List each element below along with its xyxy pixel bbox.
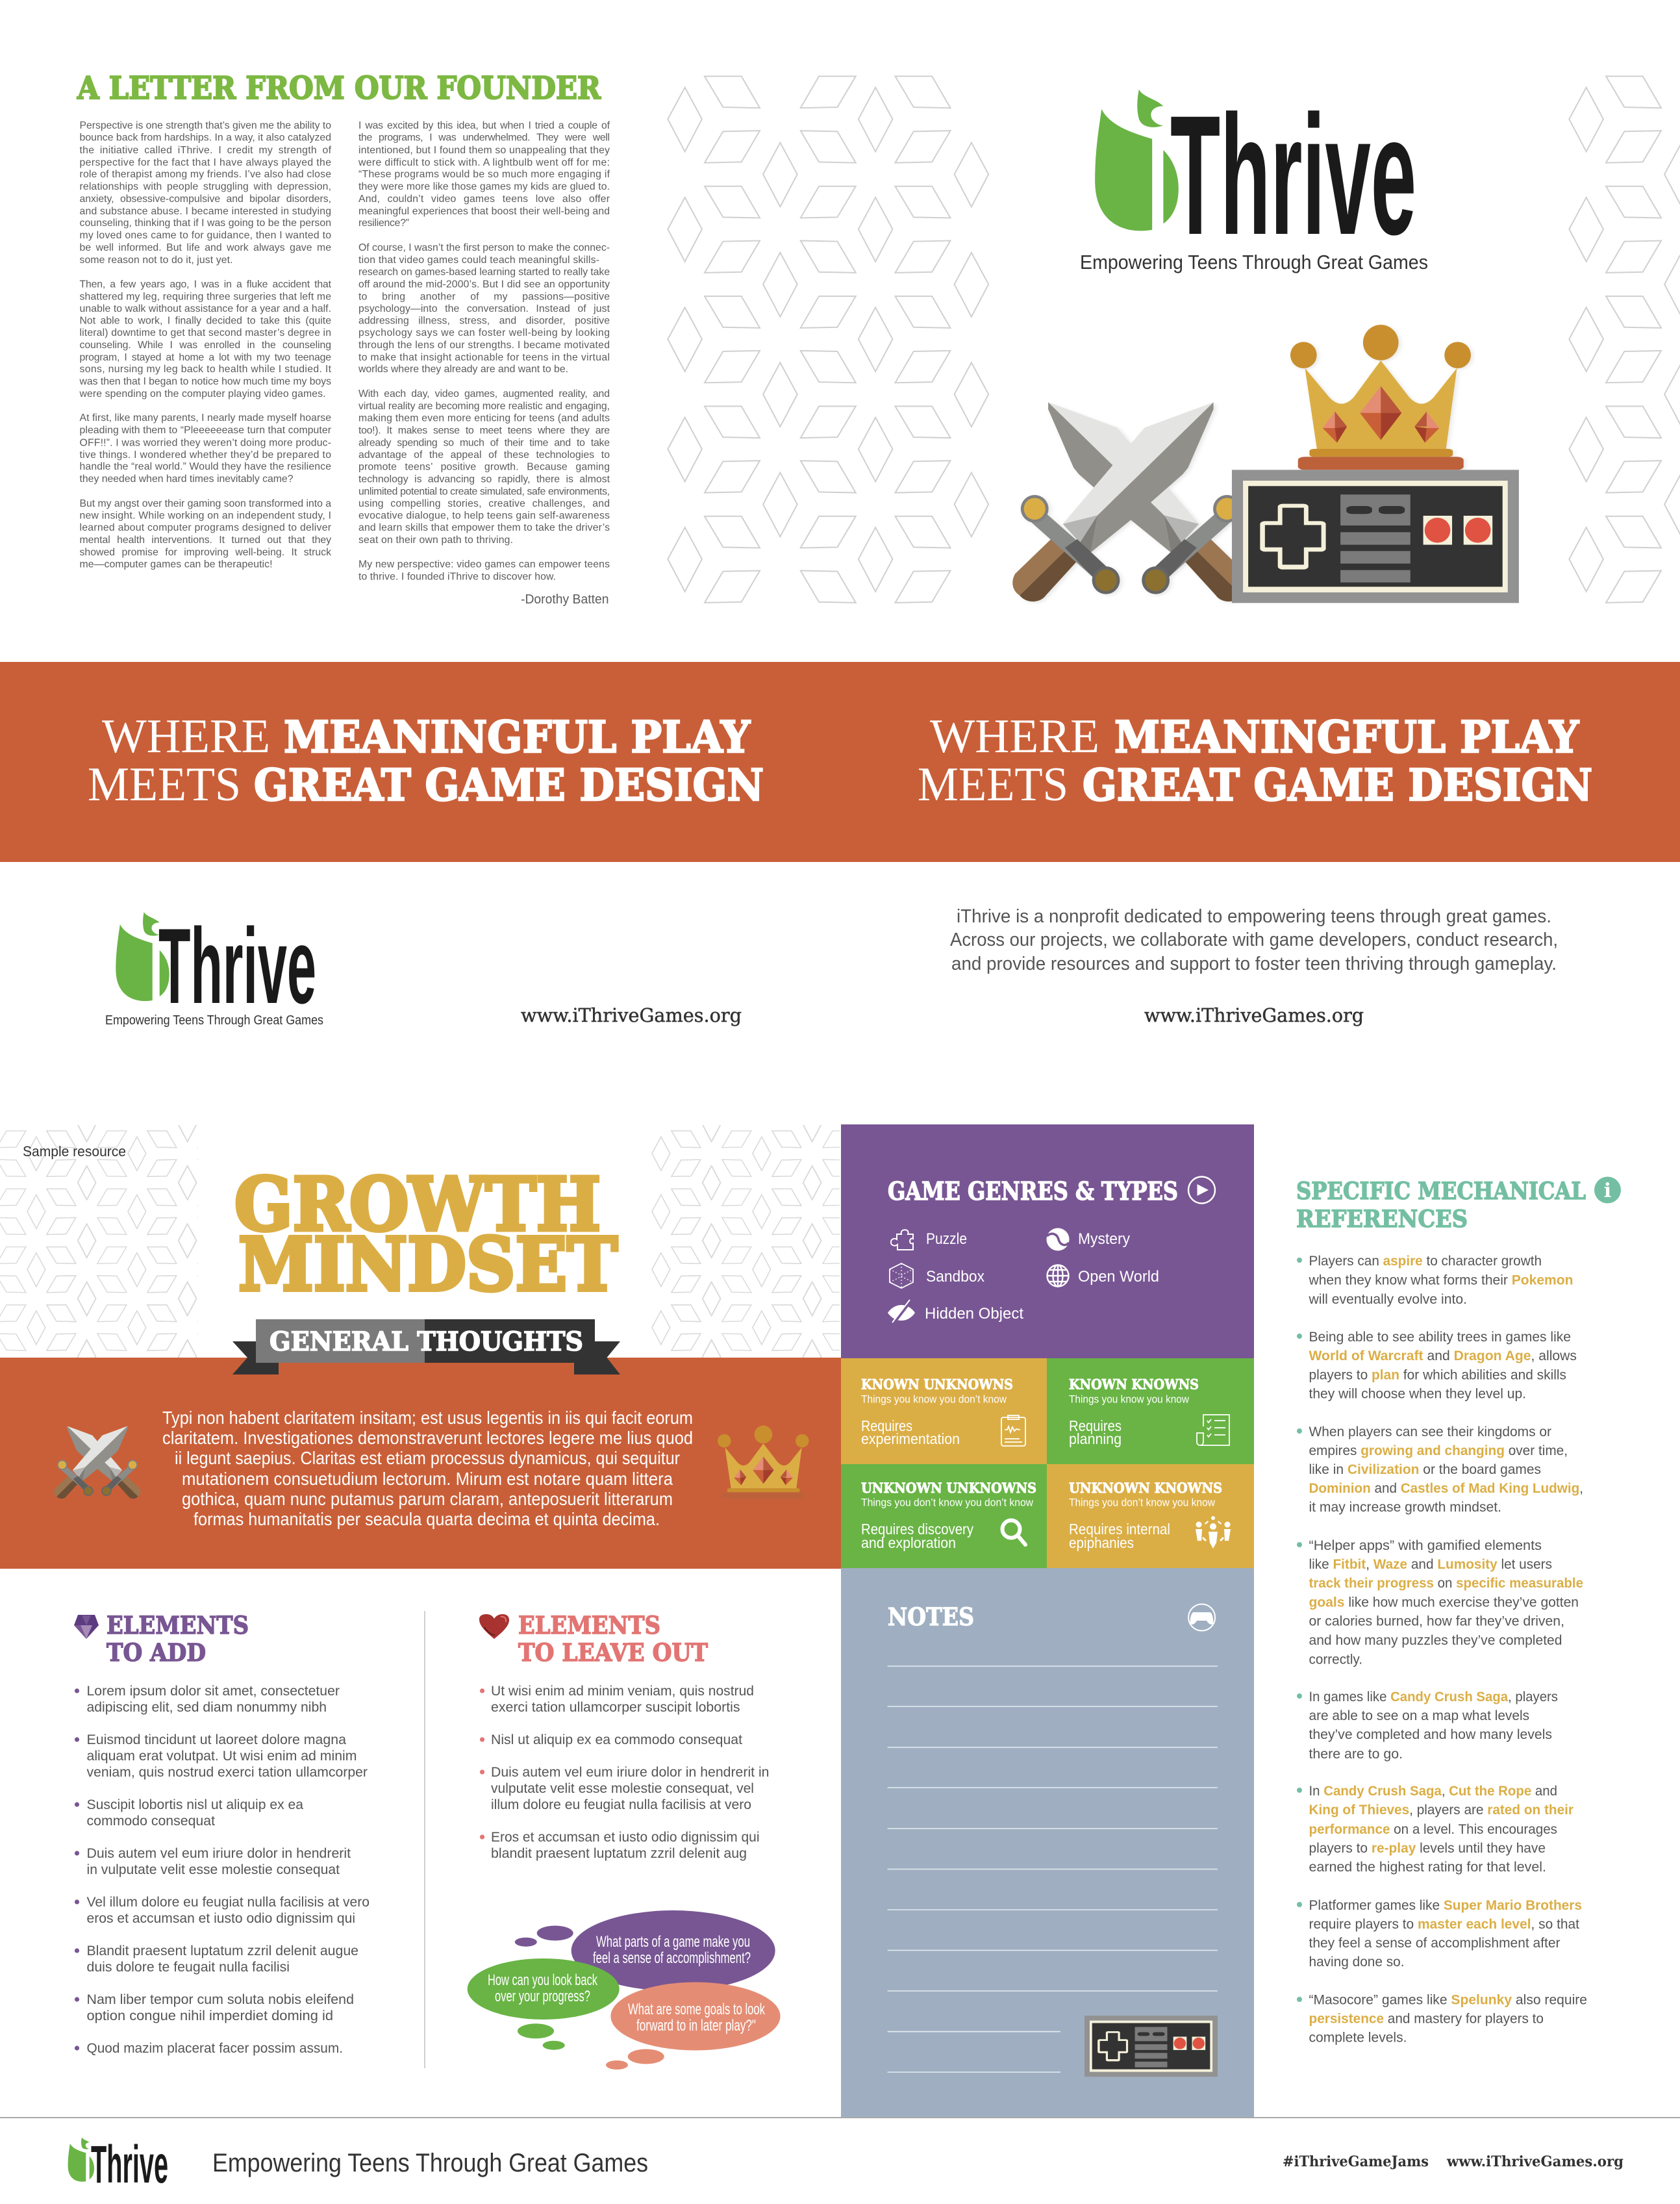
text block: about iThrive: and provide resources and support to foster teen thriving through gameplay. <box>951 954 1557 974</box>
panel: known unknowns: KNOWN UNKNOWNS <box>861 1376 1013 1393</box>
panel: known unknowns <box>841 1358 1047 1464</box>
list: mechanical references 7 <box>1297 1898 1582 1970</box>
text block: letter left column: my loved ones came to for guidance, then I wanted to <box>79 230 331 241</box>
illustration: crown <box>1290 325 1471 470</box>
ribbon: general thoughts <box>232 1319 620 1374</box>
divider <box>424 1611 425 2068</box>
text block: letter right column: already spending so much of their time and to take <box>358 437 610 448</box>
text block: letter left column: mental health interventions. It turned out that they <box>79 535 331 546</box>
text block: letter left column: shattered my leg, requiring three surgeries that left me <box>79 291 331 302</box>
heading: banner right: MEETS <box>918 758 1068 811</box>
text block: general thoughts body <box>162 1408 693 1529</box>
panel: unknown unknowns: Things you don’t know you don’t know <box>861 1497 1034 1508</box>
label: mystery: Mystery <box>1078 1230 1130 1248</box>
text block: letter left column: Not able to work, I finally decided to take this (quite <box>79 316 331 327</box>
tagline: Empowering Teens Through Great Games <box>1080 251 1428 273</box>
text block: letter right column: were difficult to stick with. A lightbulb went off for me: <box>358 157 610 168</box>
text block: letter left column: and substance abuse. I became interested in studying <box>79 206 331 217</box>
text block: letter right column: meaningful experiences that boost their well-being and <box>358 206 610 217</box>
decorative pattern: top centre <box>668 76 988 603</box>
list: elements to add: adipiscing elit, sed diam nonummy nibh <box>87 1700 327 1715</box>
illustration: crossed swords <box>1012 402 1249 602</box>
logo: iThrive medium <box>105 906 323 1028</box>
panel: known knowns: Requires <box>1069 1417 1122 1434</box>
decorative pattern: mindset left <box>0 1108 297 1432</box>
text block: letter left column: perspective for the fact that I have always played the <box>79 157 331 168</box>
text block: letter right column: and learn skills that empower them to take the driver’s <box>358 522 610 533</box>
heading: elements to leave out <box>518 1611 708 1667</box>
list: mechanical references 3: When players can see their kingdoms or <box>1309 1425 1551 1439</box>
heading: specific mechanical references: REFERENCES <box>1296 1206 1468 1233</box>
speech bubble: salmon <box>606 1982 781 2070</box>
list: mechanical references 3 <box>1297 1425 1583 1515</box>
text block: letter left column: some reason not to do it, just yet. <box>79 255 232 266</box>
list: mechanical references 6: players to re-play levels until they have <box>1309 1841 1546 1856</box>
panel: known knowns: planning <box>1069 1430 1122 1447</box>
text block: letter left column <box>79 120 332 570</box>
list: elements to add: duis dolore te feugait nulla facilisi <box>87 1960 290 1975</box>
label: hidden object: Hidden Object <box>925 1305 1023 1323</box>
text block: letter right column: And, couldn’t video games teens love also offer <box>358 194 610 205</box>
list: elements to add: Quod mazim placerat facer possim assum. <box>87 2041 343 2056</box>
list: elements to add <box>75 1684 370 2056</box>
list: mechanical references 7: require players to master each level, so that <box>1309 1917 1579 1932</box>
text block: letter right column: they were more like those games my kids are glued to. <box>358 181 610 192</box>
list: mechanical references 2: World of Warcraft and Dragon Age, allows <box>1309 1349 1577 1363</box>
heading: notes: NOTES <box>888 1602 974 1631</box>
label: puzzle: Puzzle <box>926 1230 967 1248</box>
panel: orange banner <box>0 662 1680 862</box>
list: mechanical references 5: In games like Candy Crush Saga, players <box>1309 1690 1558 1704</box>
list: elements to add: in vulputate velit esse molestie consequat <box>87 1862 340 1877</box>
panel: unknown knowns: Things you don’t know you know <box>1069 1497 1216 1508</box>
icon: puzzle <box>891 1230 913 1250</box>
website link left: www.iThriveGames.org <box>521 1004 742 1026</box>
text block: letter left column: role of therapist among my friends. I’ve also had close <box>79 169 331 180</box>
logo: iThrive medium: Thrive <box>158 906 316 1026</box>
list: mechanical references 3: it may increase growth mindset. <box>1309 1500 1501 1515</box>
text block: letter right column: too!). It makes sense to meet teens where they are <box>358 425 610 436</box>
heading: elements to add: TO ADD <box>107 1638 206 1667</box>
text block: letter right column: to thrive. I founded iThrive to discover how. <box>358 571 556 582</box>
icon: gamepad <box>1188 1604 1215 1630</box>
panel: unknown unknowns: Requires discovery <box>861 1521 973 1538</box>
icon: sandbox <box>890 1263 913 1288</box>
list: mechanical references 1 <box>1297 1254 1573 1307</box>
text block: letter left column: they needed when hard times inevitably came? <box>79 474 294 485</box>
text block: letter right column: I was excited by this idea, but when I tried a couple of <box>358 120 610 131</box>
title: growth mindset: GROWTH <box>234 1163 601 1247</box>
label: open world: Open World <box>1078 1268 1159 1286</box>
logo: iThrive medium: Empowering Teens Through Great Games <box>105 1013 323 1028</box>
text block: letter left column: handle the “real world.” Would they have the resilience <box>79 461 331 472</box>
list: mechanical references 8: complete levels. <box>1309 2031 1407 2046</box>
list: elements to add: eros et accumsan et iusto odio dignissim qui <box>87 1911 355 1926</box>
text block: letter left column: anxiety, obsessive-compulsive and bipolar disorders, <box>79 194 331 205</box>
speech bubble: green: over your progress? <box>495 1988 590 2005</box>
text block: letter right column: With each day, video games, augmented reality, and <box>358 388 610 399</box>
panel: known knowns: KNOWN KNOWNS <box>1069 1376 1199 1393</box>
text block: letter left column: Then, a few years ago, I was in a fluke accident that <box>79 279 332 290</box>
list: mechanical references 1: Players can aspire to character growth <box>1309 1254 1542 1269</box>
list: mechanical references 8 <box>1297 1993 1587 2046</box>
heading: banner left <box>88 710 764 811</box>
list: elements to leave out: exerci tation ullamcorper suscipit lobortis <box>491 1700 740 1715</box>
list: elements to add: Suscipit lobortis nisl ut aliquip ex ea <box>87 1797 303 1812</box>
list: mechanical references 4: track their progress on specific measurable <box>1309 1576 1583 1591</box>
icon: info: i <box>1604 1180 1611 1202</box>
list: mechanical references 3: empires growing and changing over time, <box>1309 1443 1568 1458</box>
text: Thrive <box>1170 80 1416 270</box>
text block: letter right column: My new perspective: video games can empower teens <box>358 559 610 570</box>
list: mechanical references 4: like Fitbit, Waze and Lumosity let users <box>1309 1557 1552 1572</box>
text block: letter left column: the initiative called iThrive. I credit my strength of <box>79 145 332 156</box>
speech bubble: salmon: What are some goals to look <box>628 2001 766 2018</box>
icon: small crown <box>718 1426 809 1499</box>
illustration: game controller <box>1232 470 1519 603</box>
icon: checklist <box>1197 1415 1229 1445</box>
list: mechanical references 4: correctly. <box>1309 1653 1362 1667</box>
list: mechanical references 6: earned the highest rating for that level. <box>1309 1860 1546 1875</box>
speech bubble: green <box>468 1958 620 2050</box>
heading: banner left: GREAT GAME DESIGN <box>254 759 764 811</box>
list: mechanical references 4 <box>1297 1538 1583 1667</box>
list: mechanical references 2: Being able to see ability trees in games like <box>1309 1330 1571 1345</box>
list: elements to leave out: vulputate velit esse molestie consequat, vel <box>491 1781 754 1796</box>
list: elements to add: aliquam erat volutpat. Ut wisi enim ad minim <box>87 1749 357 1764</box>
panel: known unknowns: experimentation <box>861 1430 960 1447</box>
list: mechanical references 5: there are to go. <box>1309 1747 1403 1762</box>
panel: known knowns: Things you know you know <box>1069 1393 1190 1406</box>
panel: unknown knowns: epiphanies <box>1069 1534 1134 1551</box>
text block: letter left column: be well informed. But life and work always gave me <box>79 242 331 253</box>
text: Thrive <box>91 2135 168 2194</box>
panel: unknown knowns: UNKNOWN KNOWNS <box>1069 1480 1222 1496</box>
panel: unknown unknowns: and exploration <box>861 1534 956 1551</box>
text block: letter left column: showed promise for improving well-being. It struck <box>79 547 331 558</box>
website link right: www.iThriveGames.org <box>1144 1004 1364 1026</box>
list: mechanical references 8: “Masocore” games like Spelunky also require <box>1309 1993 1587 2008</box>
text block: letter right column: technology is advancing so rapidly, there is almost <box>358 474 610 485</box>
list: mechanical references 8: persistence and mastery for players to <box>1309 2012 1544 2027</box>
list: mechanical references 6 <box>1297 1784 1573 1875</box>
list: elements to leave out: Ut wisi enim ad minim veniam, quis nostrud <box>491 1684 754 1699</box>
list: mechanical references 4: and how many puzzles they’ve completed <box>1309 1633 1562 1648</box>
list: mechanical references 4: goals like how much exercise they’ve gotten <box>1309 1595 1579 1610</box>
footer tagline: Empowering Teens Through Great Games <box>212 2149 648 2177</box>
list: elements to add: Duis autem vel eum iriure dolor in hendrerit <box>87 1846 351 1861</box>
text block: letter right column: addressing illness, stress, and disorder, positive <box>358 316 610 327</box>
heading: game genres and types: GAME GENRES & TYPES <box>888 1176 1178 1206</box>
list: mechanical references 4: or calories burned, how far they’ve driven, <box>1309 1614 1564 1629</box>
list: mechanical references 6: performance on a level. This encourages <box>1309 1822 1557 1837</box>
text block: letter left column: learned about computer programs designed to deliver <box>79 522 331 533</box>
speech bubble: green: How can you look back <box>488 1971 598 1989</box>
icon: notes controller <box>1084 2016 1218 2077</box>
label: sandbox: Sandbox <box>926 1268 984 1286</box>
decorative pattern: top right <box>1569 76 1680 603</box>
heading: specific mechanical references: SPECIFIC MECHANICAL <box>1296 1178 1586 1205</box>
text block: letter right column: resilience?” <box>358 218 409 229</box>
list: elements to leave out: Eros et accumsan et iusto odio dignissim qui <box>491 1830 760 1845</box>
icon: people <box>1196 1516 1231 1549</box>
text block: letter right column: to bring another of my passions—positive <box>358 291 610 302</box>
list: mechanical references 7: Platformer games like Super Mario Brothers <box>1309 1898 1582 1913</box>
heading: elements to add <box>107 1611 249 1667</box>
list: elements to add: veniam, quis nostrud exerci tation ullamcorper <box>87 1765 368 1780</box>
panel: known unknowns: Requires <box>861 1417 912 1434</box>
text block: letter right column: using compelling stories, creative challenges, and <box>358 498 610 509</box>
decorative pattern: mindset right <box>551 1108 922 1432</box>
text block: general thoughts body: formas humanitatis per seacula quarta decima et quinta decima. <box>194 1509 660 1529</box>
heading: banner right <box>918 710 1592 811</box>
text block: about iThrive <box>950 906 1558 974</box>
speech bubble: purple <box>515 1910 775 1991</box>
list: mechanical references 7: having done so. <box>1309 1955 1404 1970</box>
list: mechanical references 6: In Candy Crush Saga, Cut the Rope and <box>1309 1784 1557 1799</box>
title: growth mindset: MINDSET <box>238 1222 618 1308</box>
title: growth mindset <box>234 1163 618 1308</box>
text block: letter right column: making them even more enticing for teens (and adults <box>358 412 610 424</box>
panel: unknown unknowns: UNKNOWN UNKNOWNS <box>861 1480 1036 1496</box>
ribbon: general thoughts: GENERAL THOUGHTS <box>270 1326 583 1357</box>
list: elements to leave out: Duis autem vel eum iriure dolor in hendrerit in <box>491 1765 769 1780</box>
list: elements to add: Blandit praesent luptatum zzril delenit augue <box>87 1944 358 1958</box>
heading: banner right: MEANINGFUL PLAY <box>1114 711 1579 763</box>
text block: letter left column: program, I stayed at home a lot with my two teenage <box>79 352 331 363</box>
list: mechanical references 1: when they know what forms their Pokemon <box>1308 1273 1573 1287</box>
text block: letter right column: virtual reality are becoming more realistic and engaging, <box>358 401 610 412</box>
icon: hidden object eye <box>888 1300 915 1324</box>
logo: iThrive large <box>1095 80 1416 270</box>
logo: footer <box>68 2135 168 2194</box>
text block: letter left column: relationships with people struggling with depression, <box>79 181 331 192</box>
footer website: www.iThriveGames.org <box>1446 2153 1624 2170</box>
list: elements to add: Lorem ipsum dolor sit amet, consectetuer <box>87 1684 340 1699</box>
text block: letter right column: to make that insight actionable for teens in the virtual <box>358 352 610 363</box>
panel: unknown knowns: Requires internal <box>1069 1521 1170 1538</box>
list: mechanical references 1: will eventually evolve into. <box>1308 1292 1467 1307</box>
list: elements to leave out: illum dolore eu feugiat nulla facilisis at vero <box>491 1797 751 1812</box>
list: elements to add: option congue nihil imperdiet doming id <box>87 2008 333 2023</box>
text block: general thoughts body: ii legunt saepius. Claritas est etiam processus dynamicus, qui sequitur <box>175 1448 680 1468</box>
heading: elements to leave out: TO LEAVE OUT <box>518 1638 708 1667</box>
text block: letter left column: Perspective is one strength that’s given me the ability to <box>79 120 331 131</box>
list: mechanical references 3: like in Civilization or the board games <box>1309 1462 1541 1477</box>
text block: letter right column: through the lens of our strengths. I became motivated <box>358 340 610 351</box>
speech bubble: salmon: forward to in later play?" <box>636 2017 756 2034</box>
text block: letter right column: intentioned, but I found them so unappealing that they <box>358 145 610 156</box>
icon: gem <box>74 1615 99 1639</box>
text block: letter left column: counseling. While I was enrolled in the counseling <box>79 340 331 351</box>
icon: info <box>1594 1177 1621 1203</box>
panel: notes <box>841 1568 1254 2118</box>
icon: mystery <box>1047 1228 1069 1251</box>
list: mechanical references 5: are able to see on a map what levels <box>1309 1708 1529 1723</box>
heading: banner left: WHERE <box>102 710 270 763</box>
heading: elements to add: ELEMENTS <box>107 1611 249 1640</box>
text block: letter left column: literal) downtime to get that second master’s degree in <box>79 327 331 338</box>
text block: letter left column: were spending on the computer playing video games. <box>79 388 326 399</box>
speech bubble: purple: feel a sense of accomplishment? <box>593 1949 751 1967</box>
text block: letter right column <box>358 120 610 582</box>
list: mechanical references 2 <box>1297 1330 1577 1402</box>
list: mechanical references 4: “Helper apps” with gamified elements <box>1309 1538 1542 1553</box>
heading: banner right: WHERE <box>930 710 1099 763</box>
label: sample resource: Sample resource <box>23 1143 126 1159</box>
heading: banner left: MEANINGFUL PLAY <box>284 711 751 763</box>
text block: letter left column: tive things. I wondered whether they’d be prepared to <box>79 450 331 461</box>
panel: known unknowns: Things you know you don’t know <box>861 1393 1007 1406</box>
list: elements to leave out <box>480 1684 769 1861</box>
text block: letter right column: the programs, I was underwhelmed. They were well <box>358 133 610 144</box>
text block: about iThrive: iThrive is a nonprofit dedicated to empowering teens through great games. <box>957 906 1551 927</box>
footer hashtag: #iThriveGameJams <box>1283 2153 1429 2170</box>
text block: about iThrive: Across our projects, we collaborate with game developers, conduct research, <box>950 930 1558 950</box>
icon: play <box>1188 1177 1215 1203</box>
text block: letter right column: “These programs would be so much more engaging if <box>358 169 610 180</box>
list: mechanical references 5 <box>1297 1690 1558 1762</box>
text block: letter right column: off around the mid-2000’s. But I did see an opportunity <box>358 279 610 290</box>
panel: game genres and types <box>841 1124 1254 1358</box>
heading: banner left: MEETS <box>88 758 241 811</box>
text block: general thoughts body: mutationem consuetudium lectorum. Mirum est notare quam littera <box>182 1469 673 1489</box>
heading: banner right: GREAT GAME DESIGN <box>1083 759 1592 811</box>
text block: letter left column: unable to walk without assistance for a year and a half. <box>79 303 331 314</box>
text block: letter right column: research on games-based learning started to really take <box>358 266 610 277</box>
text block: letter right column: promote teens’ positive growth. Because gaming <box>358 462 610 473</box>
text block: letter right column: tion that video games could teach meaningful skills- <box>358 255 599 266</box>
list: elements to leave out: blandit praesent luptatum zzril delenit aug <box>491 1846 747 1861</box>
text block: letter left column: sons, nursing my leg back to health while I studied. It <box>79 364 332 375</box>
text block: letter right column: psychology—into the conversation. Instead of just <box>358 303 610 314</box>
speech bubble: purple: What parts of a game make you <box>596 1933 750 1951</box>
text block: letter left column: me—computer games can be therapeutic! <box>79 559 273 570</box>
text block: general thoughts body: gothica, quam nunc putamus parum claram, anteposuerit litterarum <box>182 1489 673 1509</box>
list: elements to leave out: Nisl ut aliquip ex ea commodo consequat <box>491 1732 742 1747</box>
icon: heart <box>479 1614 509 1639</box>
list: mechanical references 3: Dominion and Castles of Mad King Ludwig, <box>1309 1481 1583 1496</box>
list: elements to add: Vel illum dolore eu feugiat nulla facilisis at vero <box>87 1895 370 1910</box>
list: mechanical references 6: King of Thieves, players are rated on their <box>1309 1803 1573 1818</box>
text block: letter left column: OFF!!”. I was worried they weren’t doing more produc- <box>79 437 331 448</box>
text block: letter right column: evocative dialogue, to help teens gain self-awareness <box>358 510 610 521</box>
text block: letter left column: At first, like many parents, I nearly made myself hoarse <box>79 412 331 424</box>
icon: open world globe <box>1047 1265 1069 1286</box>
text block: letter right column: unlimited potential to create simulated, safe environments, <box>358 486 610 497</box>
text block: general thoughts body: Typi non habent claritatem insitam; est usus legentis in iis qui facit eorum <box>162 1408 693 1428</box>
icon: magnifier <box>1003 1520 1025 1545</box>
text block: letter right column: worlds where they already are and want to be. <box>358 364 568 375</box>
text block: letter left column: new insight. While working on an independent study, I <box>79 510 331 521</box>
panel: unknown knowns <box>1047 1464 1254 1568</box>
list: mechanical references 2: they will choose when they level up. <box>1309 1386 1526 1402</box>
panel: unknown unknowns <box>841 1464 1047 1568</box>
list: mechanical references 7: they feel a sense of accomplishment after <box>1309 1936 1560 1951</box>
footer rule <box>0 2117 1680 2118</box>
title: a letter from our founder: A LETTER FROM OUR FOUNDER <box>77 70 601 107</box>
text block: letter left column: counseling, thinking that if I was going to be the person <box>79 218 331 229</box>
signature: -Dorothy Batten <box>521 592 609 607</box>
text block: letter right column: seat on their own path to thriving. <box>358 535 513 546</box>
text block: letter right column: Of course, I wasn’t the first person to make the connec- <box>358 242 610 253</box>
icon: clipboard <box>1001 1415 1025 1446</box>
text block: letter left column: But my angst over their gaming soon transformed into a <box>79 498 331 509</box>
list: elements to add: Nam liber tempor cum soluta nobis eleifend <box>87 1992 354 2007</box>
list: elements to add: commodo consequat <box>87 1814 215 1829</box>
heading: elements to leave out: ELEMENTS <box>518 1611 660 1640</box>
list: mechanical references 5: they’ve completed and how many levels <box>1309 1727 1552 1742</box>
panel: orange general thoughts <box>0 1358 841 1569</box>
text block: letter left column: bounce back from hardships. In a way, it also catalyzed <box>79 133 331 144</box>
list: elements to add: Euismod tincidunt ut laoreet dolore magna <box>87 1732 346 1747</box>
icon: small swords <box>54 1426 141 1499</box>
heading: specific mechanical references <box>1296 1178 1586 1233</box>
text block: general thoughts body: claritatem. Investigationes demonstraverunt lectores legere me lius quod <box>162 1428 693 1448</box>
text block: letter left column: was then that I began to notice how much time my boys <box>79 376 331 387</box>
note lines <box>888 1666 1218 2072</box>
text block: letter right column: psychology says we can foster well-being by looking <box>358 327 610 338</box>
text block: letter right column: advantage of the appeal of these technologies to <box>358 450 610 461</box>
list: mechanical references 2: players to plan for which abilities and skills <box>1309 1368 1566 1382</box>
panel: known knowns <box>1047 1358 1254 1464</box>
text block: letter left column: pleading with them to “Pleeeeeease turn that computer <box>79 425 331 436</box>
